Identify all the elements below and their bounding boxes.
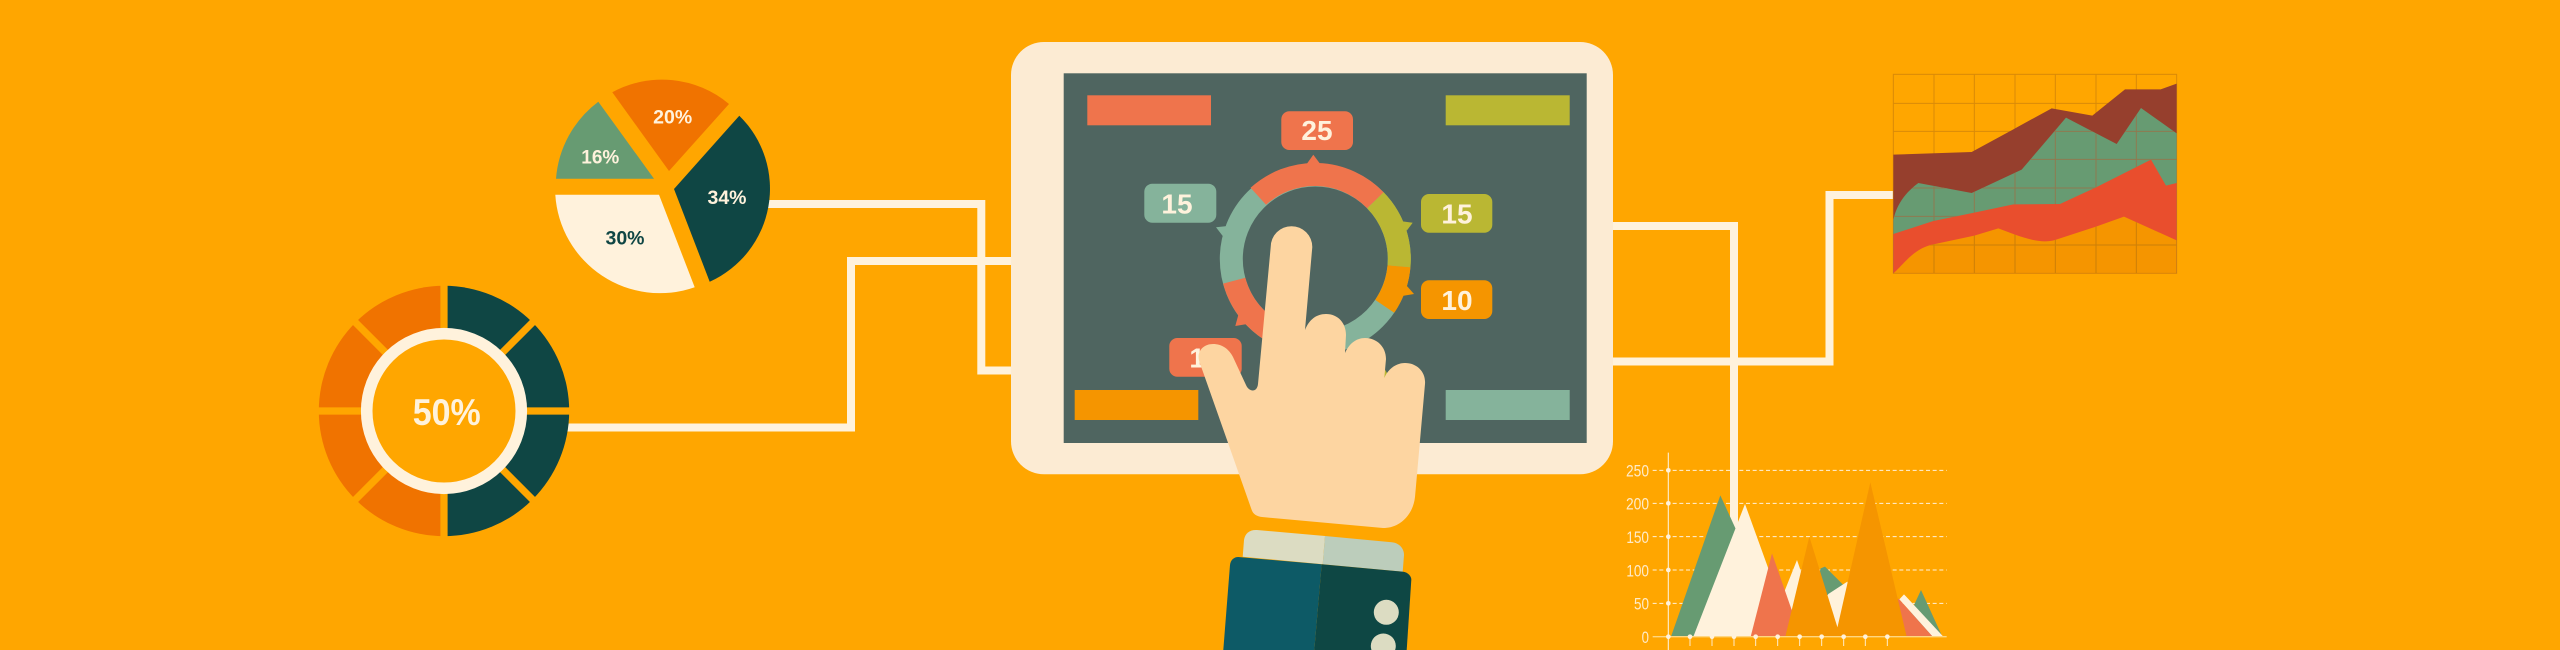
badge: 10 right bbox=[1421, 280, 1492, 319]
label: 20%: 20% bbox=[653, 108, 692, 128]
area: orange series bbox=[1893, 217, 2177, 273]
legend bar: red bbox=[1087, 95, 1211, 125]
area: red series bbox=[1893, 160, 2177, 273]
badge: 15 right: 15 bbox=[1441, 198, 1473, 229]
badge: 25 bbox=[1281, 111, 1353, 150]
shirt cuff bbox=[1243, 530, 1325, 564]
axis labels: 150 bbox=[1626, 529, 1649, 547]
icon: pointing hand bbox=[1199, 226, 1425, 528]
slice: 34% bbox=[674, 116, 770, 282]
badge: 15 right bbox=[1421, 194, 1492, 233]
axes bbox=[1653, 453, 1947, 650]
slice: 20% bbox=[612, 80, 729, 171]
donut chart 50% bbox=[313, 280, 575, 542]
ring gauge bbox=[1216, 155, 1414, 384]
chart grid bbox=[1893, 74, 2177, 273]
donut chart 50%: 50% bbox=[413, 392, 481, 433]
axis labels bbox=[1626, 463, 1649, 647]
connector: pie chart to tablet bbox=[760, 204, 1020, 370]
series triangles bbox=[1671, 482, 1943, 637]
tablet screen bbox=[1064, 73, 1587, 443]
badge: 15 left: 15 bbox=[1161, 188, 1193, 219]
badge: 15 left bbox=[1144, 184, 1216, 223]
axis labels: 0 bbox=[1642, 629, 1649, 647]
badge: lower left: 10 bbox=[1189, 342, 1221, 373]
connector: donut chart to tablet bbox=[560, 261, 1020, 428]
slice: 30% bbox=[555, 195, 695, 293]
area chart bbox=[1893, 74, 2177, 273]
axis labels: 200 bbox=[1626, 496, 1649, 514]
connector: tablet to area chart bbox=[1600, 195, 1900, 362]
badge: lower left bbox=[1169, 338, 1242, 377]
axis labels: 250 bbox=[1626, 463, 1649, 481]
legend bar: orange bbox=[1075, 390, 1198, 420]
badge: 10 right: 10 bbox=[1441, 285, 1473, 316]
tablet bbox=[1011, 42, 1613, 474]
area: green series bbox=[1893, 108, 2177, 273]
label: 30%: 30% bbox=[606, 228, 645, 250]
axis labels: 50 bbox=[1634, 596, 1649, 614]
area: brown series bbox=[1893, 84, 2177, 273]
ring pointer tips bbox=[1235, 155, 1321, 326]
axis dots bbox=[1666, 468, 1890, 639]
label: 16%: 16% bbox=[581, 148, 619, 168]
sleeve buttons bbox=[1374, 600, 1399, 625]
mountain chart bbox=[1626, 453, 1947, 650]
jacket sleeve bbox=[1223, 557, 1322, 650]
tablet body bbox=[1011, 42, 1613, 474]
icon: shirt cuff and sleeve bbox=[1223, 530, 1411, 650]
grid overlay on orange bbox=[1894, 222, 2176, 274]
legend bar: green bbox=[1446, 390, 1570, 420]
axis labels: 100 bbox=[1626, 562, 1649, 580]
badge: 25: 25 bbox=[1301, 115, 1333, 146]
dashed grid lines bbox=[1653, 470, 1947, 603]
grid overlay on green bbox=[1894, 114, 2176, 221]
slice: 16% bbox=[556, 102, 654, 179]
pie chart bbox=[555, 80, 770, 293]
connector: tablet to mountain chart bbox=[1600, 226, 1734, 530]
label: 34%: 34% bbox=[708, 188, 747, 209]
legend bar: olive bbox=[1446, 95, 1570, 125]
